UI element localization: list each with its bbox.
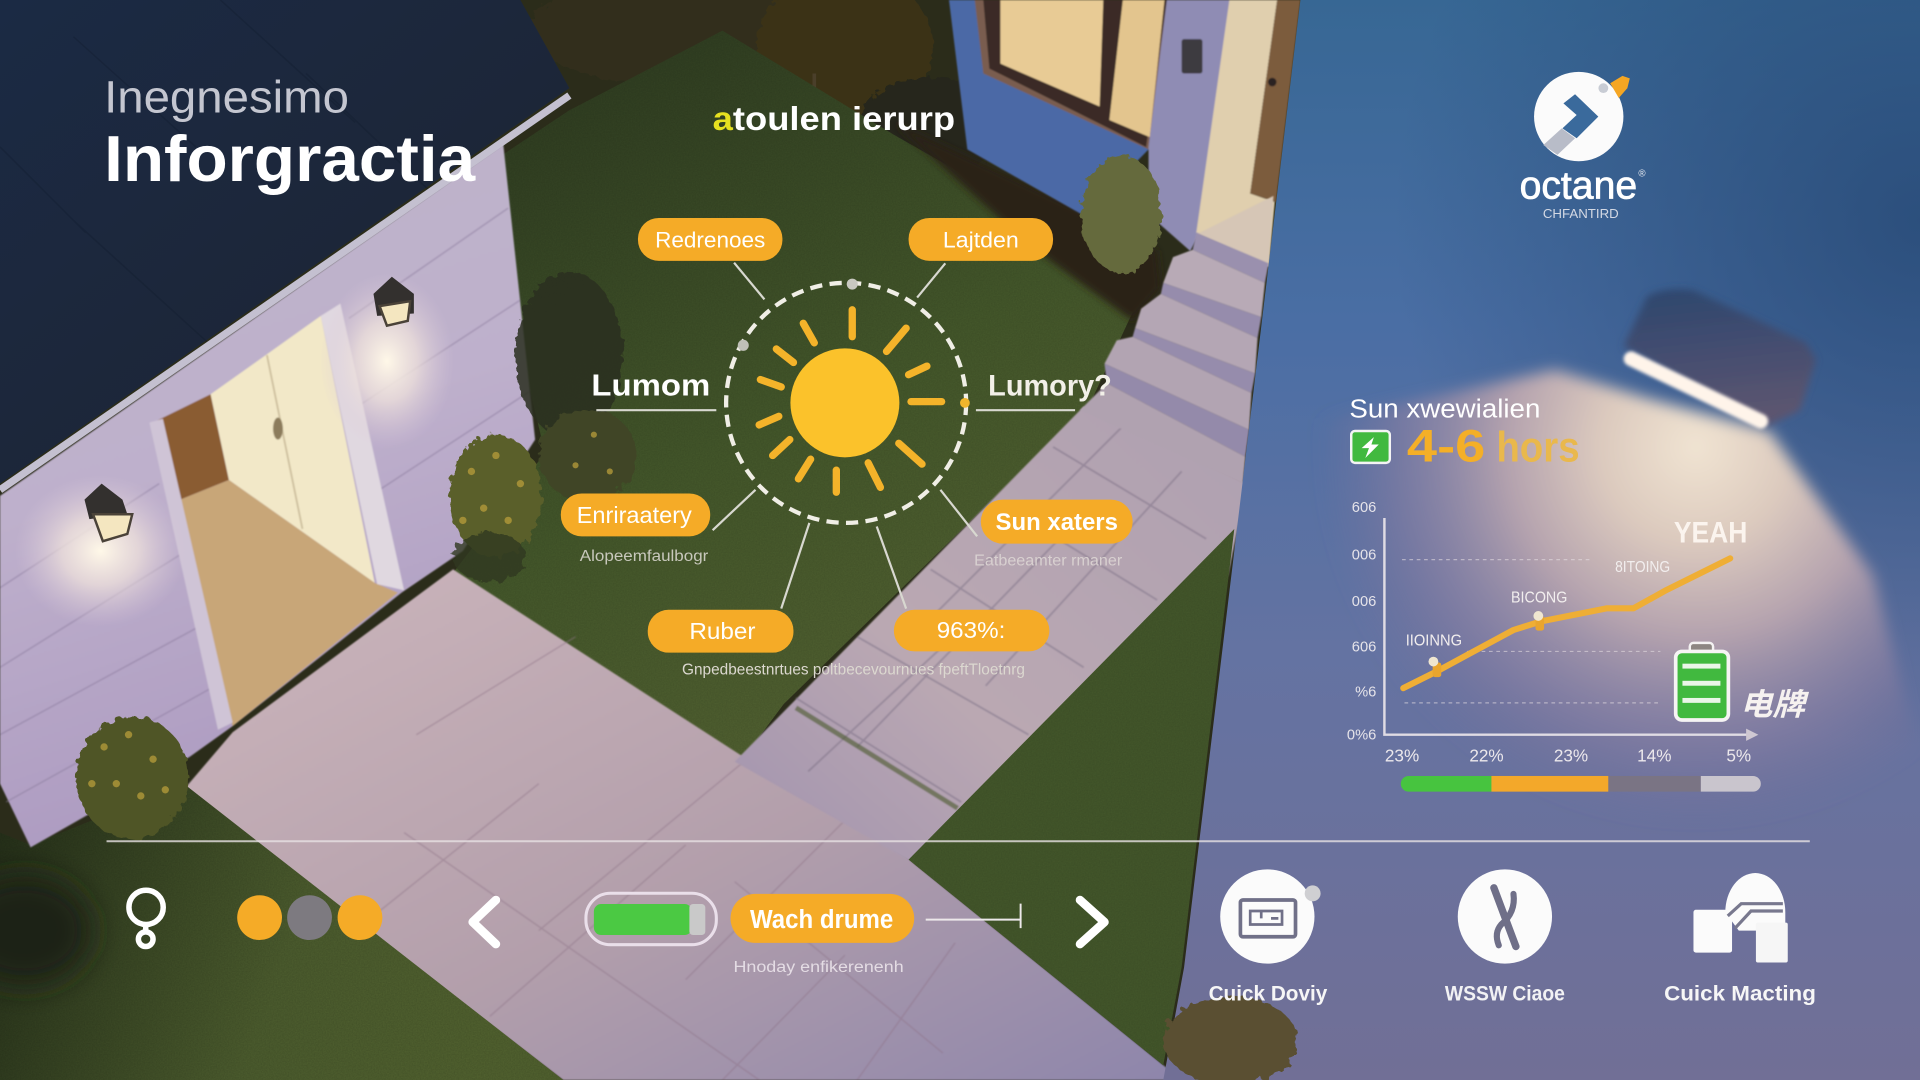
caption: lower pills: Gnpedbeestnrtues poltbecevournues fpeftTloetnrg [682, 662, 1025, 679]
lower left grass [0, 784, 563, 1080]
roof [0, 0, 569, 490]
title block [104, 72, 476, 195]
pill: Sun xaters [981, 500, 1133, 544]
icon: charging badge [1351, 431, 1390, 463]
sun disc [790, 348, 899, 457]
trend line [1403, 558, 1730, 688]
blossoms [88, 432, 613, 800]
y axis labels: %6 [1355, 685, 1376, 701]
stat unit: hors [1496, 424, 1580, 472]
y axis labels: 006 [1352, 548, 1376, 564]
dark shrub lower left [0, 876, 92, 986]
pill: Enriraatery [561, 493, 710, 536]
stat value: 4-6 [1407, 421, 1485, 472]
pill: Lajtden [909, 218, 1053, 261]
point labels: IIOINNG [1406, 632, 1462, 649]
slider line [926, 904, 1021, 928]
grid lines [1402, 560, 1660, 703]
pill: Sun xaters: Sun xaters [996, 509, 1118, 536]
title eyebrow: Inegnesimo [104, 72, 349, 123]
tree trunk [813, 73, 816, 159]
entry steps [1080, 196, 1273, 484]
charging stat [1349, 396, 1580, 472]
y axis labels: 0%6 [1347, 728, 1376, 744]
left house wall [0, 144, 535, 847]
x axis labels: 14% [1637, 746, 1671, 766]
wall lamp glow lower [15, 475, 186, 627]
mulch bed [894, 122, 1161, 321]
dashed ring [726, 283, 966, 523]
y axis labels: 006 [1352, 594, 1376, 610]
registered mark: ® [1638, 168, 1646, 179]
point labels [1406, 559, 1670, 649]
wall lamp upper [373, 277, 414, 326]
caption: Sun xaters: Eatbeeamter rmaner [974, 553, 1123, 570]
pill: Lajtden: Lajtden [943, 227, 1019, 252]
y axis labels: 606 [1352, 500, 1376, 516]
x axis labels: 23% [1385, 746, 1419, 766]
brand logo [1520, 72, 1646, 221]
action: Cuick Doviy [1209, 869, 1327, 1005]
pill: Redrenoes: Redrenoes [655, 227, 765, 252]
lawn [453, 31, 1133, 762]
connector lines [596, 263, 1075, 609]
y axis labels [1347, 500, 1376, 744]
main walkway [184, 569, 1182, 1080]
pill: 963% [894, 610, 1049, 651]
button: Wach drume: Wach drume [750, 906, 893, 934]
wall lamp lower [84, 484, 132, 541]
divider [107, 840, 1810, 842]
y axis labels: 606 [1352, 639, 1376, 655]
chart callout: YEAH [1674, 516, 1747, 549]
data markers [1428, 611, 1544, 677]
toggle switch [586, 893, 716, 945]
bottom controls [129, 890, 1104, 976]
ring markers [738, 279, 970, 408]
pill: Ruber: Ruber [689, 618, 756, 644]
quick actions [1209, 869, 1816, 1005]
battery label: 电牌 [1740, 679, 1810, 724]
button caption: Hnoday enfikerenenh [733, 959, 904, 976]
lower right grass [909, 529, 1234, 1065]
icon: battery [1676, 643, 1728, 720]
logo mark [1534, 72, 1630, 161]
action: Cuick Doviy: Cuick Doviy [1209, 981, 1327, 1005]
sun rays [759, 310, 942, 492]
pill: Redrenoes [638, 218, 782, 261]
axes [1384, 518, 1758, 741]
label: Lumory: Lumory? [988, 370, 1112, 403]
caption: Enriraatery: Alopeemfaulbogr [580, 548, 709, 565]
icon: pin ring [129, 890, 163, 947]
x axis labels: 22% [1469, 746, 1504, 766]
hedge and tree behind lawn [527, 0, 1004, 180]
point labels: BICONG [1511, 589, 1567, 606]
bushes [76, 156, 1162, 839]
action: WSSW Ciaoe: WSSW Ciaoe [1445, 981, 1565, 1005]
progress bar [1401, 776, 1761, 792]
diagram heading: atoulen ierurp [713, 101, 955, 138]
blue wall [1163, 0, 1920, 1080]
x axis labels [1385, 746, 1751, 766]
logo wordmark: octane [1520, 164, 1637, 207]
arrow: previous [473, 900, 496, 944]
point labels: 8ITOING [1615, 559, 1670, 576]
sun diagram [561, 218, 1133, 679]
stepping path [735, 407, 1247, 864]
title: Inforgractia [104, 122, 476, 195]
wall lamp glow upper [320, 273, 454, 449]
x axis labels: 23% [1554, 746, 1588, 766]
arrow: next [1080, 900, 1104, 944]
label: Lumom: Lumom [591, 369, 710, 403]
pill: Ruber [648, 610, 793, 653]
pill: Enriraatery: Enriraatery [577, 502, 692, 528]
line chart [1347, 500, 1810, 792]
action: Cuick Macting: Cuick Macting [1664, 981, 1816, 1005]
pill: 963%: 963%: [937, 617, 1005, 643]
pagination dots [237, 895, 382, 940]
action: WSSW Ciaoe [1445, 869, 1565, 1005]
x axis labels: 5% [1726, 746, 1751, 766]
action: Cuick Macting [1664, 873, 1816, 1005]
bush at wall base [1163, 997, 1298, 1080]
wall light fixture [1624, 289, 1816, 426]
logo tagline: CHFANTIRD [1543, 206, 1619, 221]
right house facade [949, 0, 1300, 267]
stat heading: Sun xwewialien [1349, 396, 1540, 424]
button: Wach drume [731, 894, 914, 943]
